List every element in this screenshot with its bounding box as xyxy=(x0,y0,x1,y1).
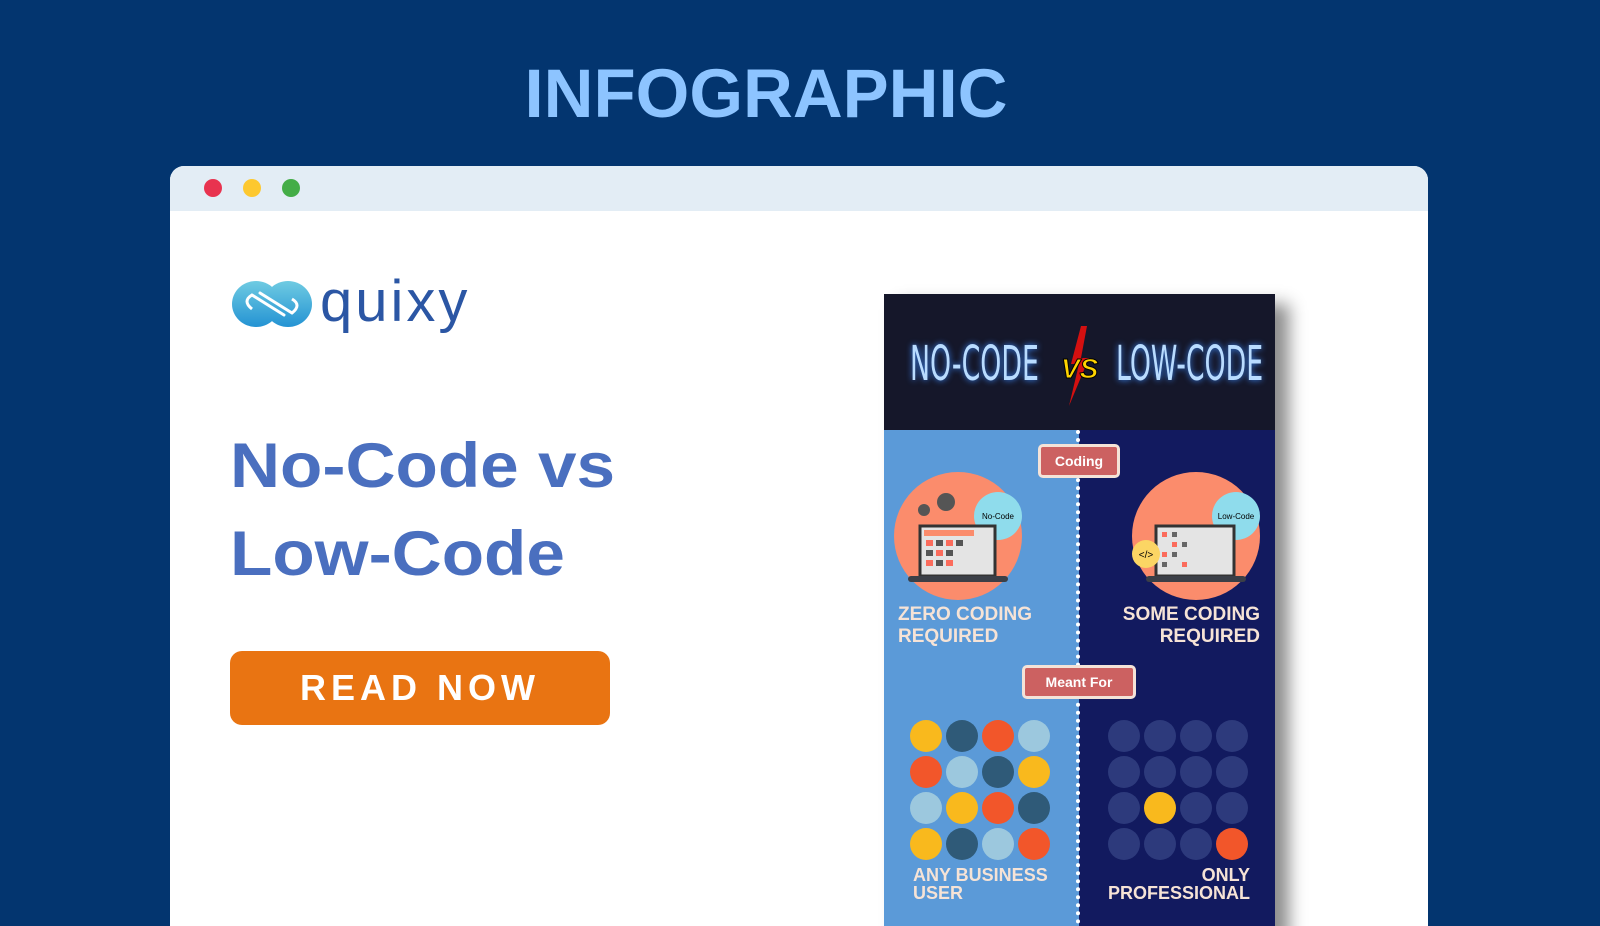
icon: no-code laptop: No-Code xyxy=(982,512,1015,521)
title: INFOGRAPHIC xyxy=(524,55,1008,132)
heading: No-Code vs Low-Code: Low-Code xyxy=(230,519,565,589)
panel: browser window xyxy=(170,166,1428,926)
infographic header xyxy=(884,294,1275,430)
left column no-code xyxy=(884,430,1079,926)
label: Coding xyxy=(1038,444,1120,478)
text: any business user: USER xyxy=(913,883,963,903)
text: any business user: ANY BUSINESS xyxy=(913,865,1048,885)
text: some coding required: SOME CODING xyxy=(1123,604,1260,625)
text: some coding required xyxy=(1123,604,1260,647)
icon: low-code laptop: Low-Code xyxy=(1218,512,1255,521)
icon: vs lightning: VS xyxy=(1061,353,1099,384)
icon: low-code laptop xyxy=(1132,472,1260,600)
text: only professional: PROFESSIONAL xyxy=(1108,883,1250,903)
window dots xyxy=(204,179,300,197)
button: READ NOW: READ NOW xyxy=(300,667,540,708)
logo: quixy xyxy=(232,269,470,334)
header text: NO-CODE: NO-CODE xyxy=(910,336,1039,392)
logo text: quixy xyxy=(320,269,470,334)
icon: no-code laptop xyxy=(894,472,1022,600)
text: only professional: ONLY xyxy=(1202,865,1250,885)
text: zero coding required xyxy=(898,604,1032,647)
label: Meant For: Meant For xyxy=(1046,674,1112,690)
header text: LOW-CODE: LOW-CODE xyxy=(1116,336,1263,392)
text: zero coding required: ZERO CODING xyxy=(898,604,1032,625)
heading: No-Code vs Low-Code: No-Code vs xyxy=(230,431,615,501)
avatars: business users xyxy=(910,720,1050,860)
browser title bar xyxy=(170,166,1428,211)
icon: vs lightning xyxy=(1061,326,1099,406)
text: only professional xyxy=(1108,865,1250,903)
icon: logo mark xyxy=(232,281,312,327)
label: Meant For xyxy=(1022,665,1136,699)
heading: No-Code vs Low-Code xyxy=(230,431,615,589)
avatars: professionals xyxy=(1108,720,1248,860)
button: READ NOW xyxy=(230,651,610,725)
panel: infographic preview xyxy=(884,294,1275,926)
label: Coding: Coding xyxy=(1055,453,1103,469)
text: zero coding required: REQUIRED xyxy=(898,626,998,647)
dotted divider xyxy=(1076,430,1080,926)
text: some coding required: REQUIRED xyxy=(1160,626,1260,647)
text: any business user xyxy=(913,865,1048,903)
right column low-code xyxy=(1079,430,1275,926)
icon: low-code laptop: </> xyxy=(1139,550,1153,561)
